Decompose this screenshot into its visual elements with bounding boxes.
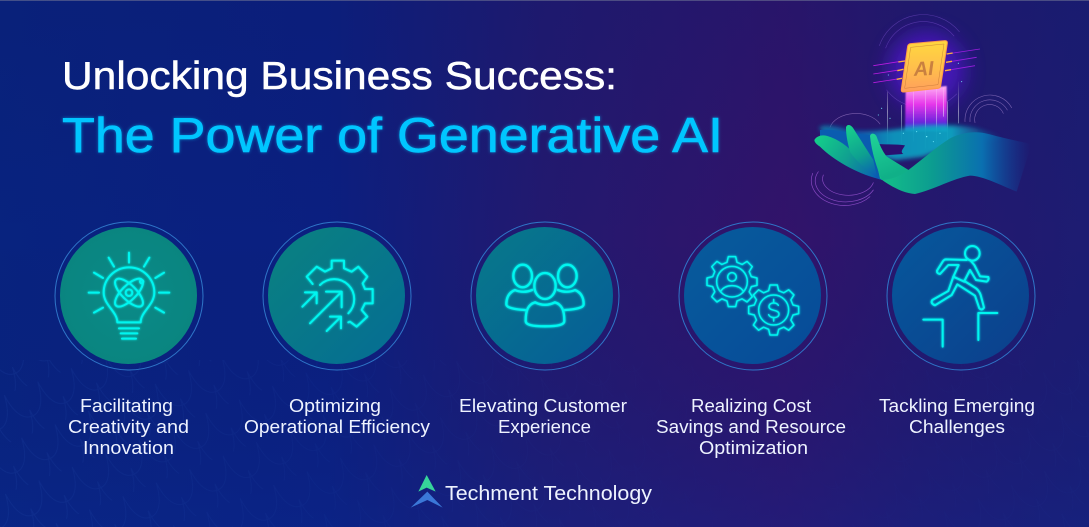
circle badge bbox=[471, 222, 619, 370]
item 2: operational efficiency bbox=[244, 222, 430, 437]
logo wordmark: Techment Technology bbox=[445, 483, 652, 505]
chip bbox=[901, 41, 947, 92]
illustration: hand holding AI chip bbox=[811, 15, 1032, 205]
title line 2: The Power of Generative AI bbox=[62, 109, 723, 163]
hand opening shadow bbox=[876, 144, 905, 155]
circle badge bbox=[55, 222, 203, 370]
label: Savings and Resource bbox=[656, 417, 846, 437]
light beam bbox=[887, 82, 958, 157]
hand underlay between fingers bbox=[820, 130, 908, 180]
icon: light bulb with atom bbox=[89, 253, 169, 339]
label: Innovation bbox=[83, 438, 174, 458]
circle badge bbox=[679, 222, 827, 370]
title line 1: Unlocking Business Success: bbox=[62, 55, 617, 98]
label bbox=[244, 396, 430, 437]
fingers bbox=[814, 125, 908, 180]
index finger bbox=[814, 135, 877, 178]
logo bbox=[411, 475, 652, 508]
chip glow bbox=[888, 32, 965, 108]
item 5: emerging challenges bbox=[879, 222, 1035, 437]
icon: group of people bbox=[506, 265, 584, 326]
circle badge bbox=[887, 222, 1035, 370]
label: Elevating Customer bbox=[459, 396, 627, 416]
chip: AI bbox=[912, 58, 935, 81]
label: Tackling Emerging bbox=[879, 396, 1035, 416]
item 3: customer experience bbox=[459, 222, 627, 437]
label: Creativity and bbox=[68, 417, 189, 437]
title bbox=[62, 55, 723, 163]
label bbox=[656, 396, 846, 458]
icon: runner climbing a step bbox=[923, 246, 997, 347]
sparkles bbox=[878, 63, 962, 142]
icon: person gear and dollar gear bbox=[707, 257, 799, 335]
label: Realizing Cost bbox=[691, 396, 811, 416]
icon: gear with arrows bbox=[302, 261, 373, 331]
item 4: cost savings and resources bbox=[656, 222, 846, 458]
sound arcs bbox=[811, 15, 1012, 205]
item 1: creativity and innovation bbox=[55, 222, 203, 458]
label bbox=[68, 396, 189, 458]
middle finger bbox=[846, 125, 877, 179]
logo mark bbox=[411, 475, 443, 508]
circuit lines bbox=[873, 49, 980, 83]
circle badge bbox=[263, 222, 411, 370]
label bbox=[459, 396, 627, 437]
label: Experience bbox=[498, 417, 591, 437]
label: Challenges bbox=[909, 417, 1005, 437]
label: Operational Efficiency bbox=[244, 417, 430, 437]
band of back of hand bbox=[819, 125, 1005, 160]
label: Optimizing bbox=[289, 396, 381, 416]
label: Facilitating bbox=[80, 396, 173, 416]
ring finger bbox=[870, 134, 908, 180]
hand palm bbox=[875, 132, 1032, 194]
label: Optimization bbox=[699, 438, 808, 458]
label bbox=[879, 396, 1035, 437]
